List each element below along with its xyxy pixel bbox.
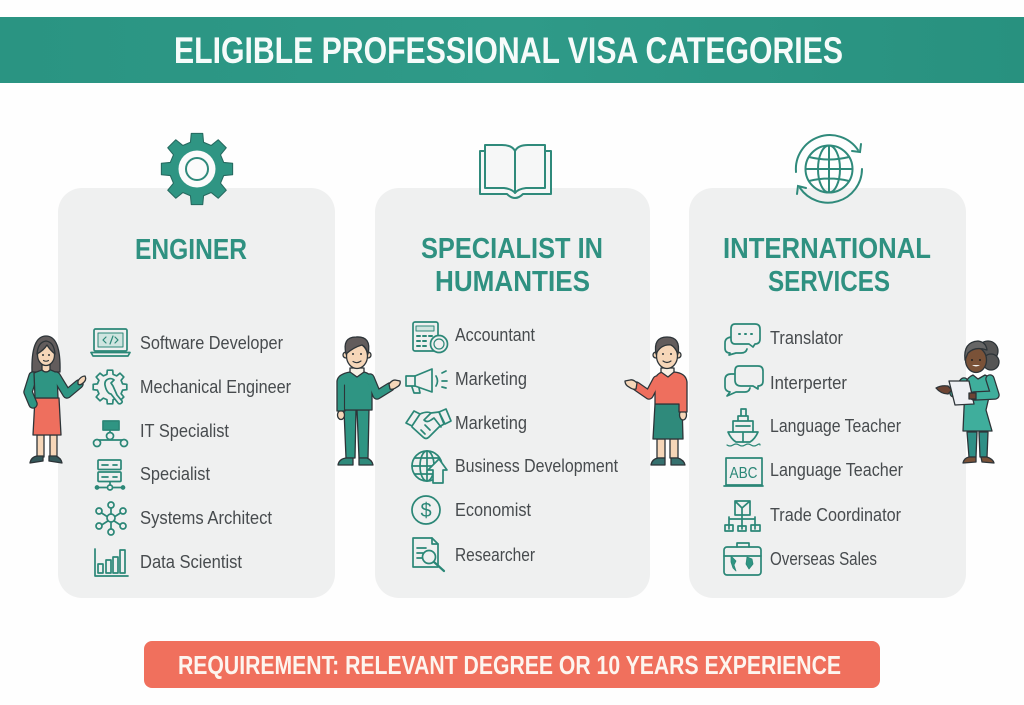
dress [963,375,992,431]
hand left [936,386,952,394]
label: specialist: Specialist [140,463,210,484]
label: mechanical engineer: Mechanical Engineer [140,376,291,397]
label: trade coordinator: Trade Coordinator [770,504,901,525]
icon: globe with arrow [412,451,447,483]
arm raised [636,380,657,395]
figure: woman presenter right [625,337,687,465]
icon: suitcase with map [724,543,761,575]
icon: hierarchy [94,421,128,446]
label: marketing second: Marketing [455,412,527,433]
heading: engineer: ENGINER [135,234,247,266]
hand [78,376,86,385]
label: researcher: Researcher [455,544,535,565]
panel: engineer [58,133,335,598]
label: translator: Translator [770,327,843,348]
head [966,348,986,372]
legs [657,439,678,458]
label: systems architect: Systems Architect [140,507,272,528]
title banner: ELIGIBLE PROFESSIONAL VISA CATEGORIES [174,30,843,71]
icon: handshake [406,409,451,438]
label: language teacher second: Language Teacher [770,459,903,480]
legs and shoes [37,435,57,457]
document [949,381,974,405]
icon: chat bubbles [725,324,760,355]
raised arm outline [370,378,390,395]
figure: woman presenter left [28,336,86,463]
label: economist: Economist [455,499,531,520]
neck and face [42,364,50,372]
heading: specialist in humanities [421,233,603,298]
heading: international services [723,233,931,298]
label: business development: Business Development [455,455,618,476]
title banner [0,17,1024,83]
shoes [963,457,994,463]
skirt [33,398,61,435]
hand raised [389,380,400,389]
near arm [974,379,995,396]
label: software developer: Software Developer [140,332,283,353]
label: data scientist: Data Scientist [140,551,242,572]
label: accountant: Accountant [455,324,535,345]
icon: calculator [413,322,448,352]
ears and face [343,352,349,358]
icon: dollar coin: $ [420,500,432,522]
label: language teacher: Language Teacher [770,415,901,436]
hair back [32,336,60,372]
label: marketing: Marketing [455,368,527,389]
head [653,352,659,358]
requirement banner [144,641,880,688]
icon: bar chart [95,549,128,576]
label: overseas sales: Overseas Sales [770,548,877,569]
icon: gear [161,133,233,205]
panel: humanities [375,145,650,598]
neck and collar [350,368,364,377]
icon: speech bubbles [725,366,763,396]
icon: organisation chart [725,501,760,531]
icon: megaphone [406,369,447,393]
icon: chalkboard [724,458,763,486]
icon: dollar coin [412,496,440,524]
hand low [338,410,344,420]
heading: international services: SERVICES [768,266,890,298]
label: interpreter: Interperter [770,372,847,393]
trousers [344,410,369,458]
blouse [655,372,687,412]
icon: rotating globe [796,135,862,203]
icon: laptop [91,329,130,356]
heading: international services: INTERNATIONAL [723,233,931,265]
arms and torso [28,376,33,404]
icon: wrench gear [93,370,127,404]
figure: woman with document [936,341,999,463]
hand [625,380,637,389]
skirt [653,404,683,439]
icon: chalkboard: ABC [730,465,758,482]
heading: specialist in humanities: HUMANTIES [435,266,590,298]
figure: man presenter [337,337,400,465]
icon: server [96,460,124,490]
label: it specialist: IT Specialist [140,420,229,441]
shoes [338,458,373,465]
hair bun [978,341,998,361]
requirement banner: REQUIREMENT: RELEVANT DEGREE OR 10 YEARS EXPERIENCE [178,650,841,680]
icon: ship [727,409,760,446]
panel: international services [689,135,966,598]
icon: network [96,502,126,535]
icon: document magnifier [413,538,444,571]
trousers [967,432,988,457]
far arm [954,382,964,393]
neck [661,368,674,377]
sweater [337,372,372,411]
icon: open book [480,145,551,198]
heading: specialist in humanities: SPECIALIST IN [421,233,603,265]
